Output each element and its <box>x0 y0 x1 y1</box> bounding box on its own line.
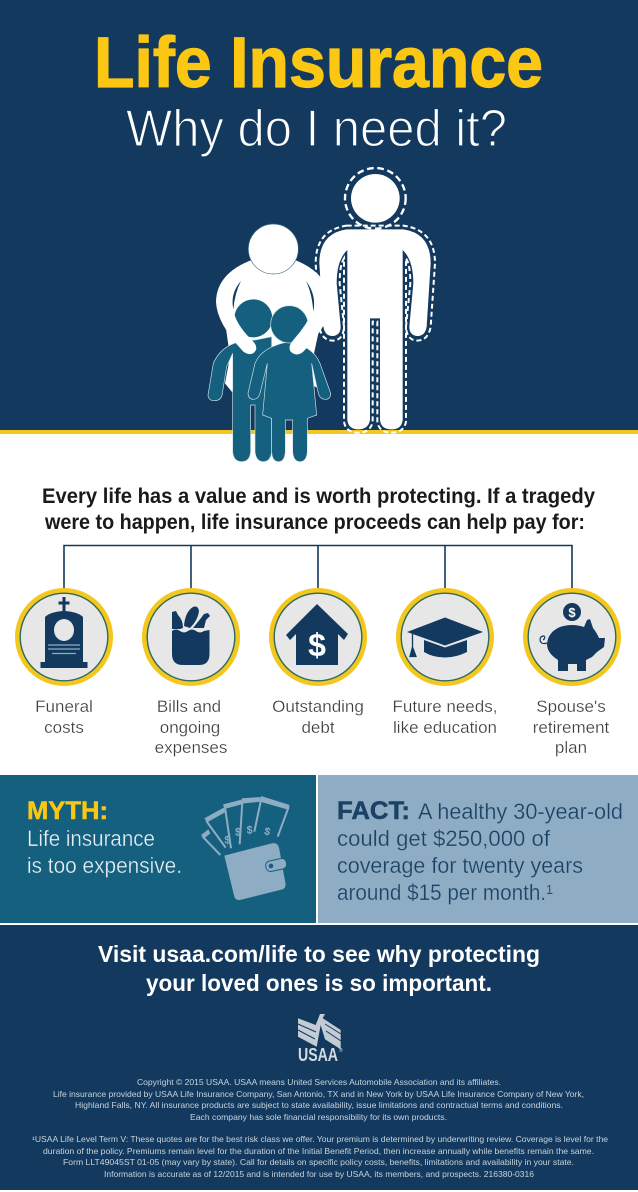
label: debt: Outstanding <box>272 697 364 716</box>
label: funeral costs: Funeral <box>35 697 93 716</box>
label: retirement: plan <box>555 738 587 757</box>
label: retirement <box>533 697 610 757</box>
icon: house with dollar: $ <box>308 627 326 663</box>
legal text: Each company has sole financial responsibility for its own products. <box>190 1112 447 1122</box>
panel: header background <box>0 0 638 430</box>
icon: child figure right <box>248 306 331 462</box>
label: education: Future needs, <box>393 697 497 716</box>
legal text: Highland Falls, NY. All insurance products are subject to state availability, issue limitations and contractual terms and conditions. <box>75 1100 563 1110</box>
icon: graduation cap <box>396 588 494 686</box>
label: debt: debt <box>301 718 335 737</box>
icon: wallet with cash: $ <box>263 826 272 839</box>
myth text: is too expensive. <box>27 853 182 878</box>
legal text: Form LLT49045ST 01-05 (may vary by state). Call for details on specific policy costs, benefits, limitations and availability in your state. <box>63 1157 574 1167</box>
icon: piggy bank <box>523 588 621 686</box>
label: funeral costs: costs <box>44 718 84 737</box>
myth text: Life insurance <box>27 826 155 851</box>
icon: adult figure arms and head <box>216 224 331 354</box>
legal text: Information is accurate as of 12/2015 and is intended for use by USAA, its members, and prospects. 216380-0316 <box>104 1169 534 1179</box>
label: retirement: Spouse's <box>536 697 606 716</box>
label: retirement: retirement <box>533 718 610 737</box>
fact text: FACT: <box>337 797 410 825</box>
label: education: like education <box>393 718 497 737</box>
myth text: MYTH: <box>27 797 108 825</box>
title: Why do I need it? <box>126 100 507 158</box>
label: funeral costs <box>35 697 93 737</box>
panel: fact <box>318 775 638 923</box>
legal text: duration of the policy. Premiums remain level for the duration of the Initial Benefit Period, then increase annually while benefits remain the same. <box>43 1146 594 1156</box>
fact text: could get $250,000 of <box>337 826 551 851</box>
logo: USAA: ® <box>339 1047 343 1054</box>
call to action: Visit usaa.com/life to see why protecting <box>98 941 540 967</box>
label: education <box>393 697 497 737</box>
label: bills: ongoing <box>160 718 220 737</box>
icon: child figure left <box>208 299 272 462</box>
fact text: A healthy 30-year-old <box>418 799 623 824</box>
fact text: around $15 per month.¹ <box>337 880 553 905</box>
icon: wallet with cash: $ <box>224 834 230 846</box>
label: debt <box>272 697 364 737</box>
heading: intro text: were to happen, life insurance proceeds can help pay for: <box>44 511 585 534</box>
call to action: your loved ones is so important. <box>146 970 492 996</box>
legal text <box>32 1077 608 1179</box>
icon: house with dollar <box>269 588 367 686</box>
heading: intro text: Every life has a value and is worth protecting. If a tragedy <box>42 485 595 508</box>
legal text: ¹USAA Life Level Term V: These quotes are for the best risk class we offer. Your premium is determined by underwriting review. Coverage is level for the <box>32 1134 608 1144</box>
label: bills <box>155 697 227 757</box>
illustration: family figures <box>208 168 435 462</box>
title <box>94 24 543 158</box>
fact text <box>337 797 623 905</box>
call to action <box>98 941 540 996</box>
logo: USAA <box>298 1014 343 1065</box>
logo: USAA: USAA <box>298 1044 338 1065</box>
legal text: Copyright © 2015 USAA. USAA means United Services Automobile Association and its affiliates. <box>137 1077 501 1087</box>
fact text: coverage for twenty years <box>337 853 583 878</box>
label: bills: expenses <box>155 738 227 757</box>
icon: adult figure torso <box>223 267 323 392</box>
icon: piggy bank: $ <box>568 605 576 620</box>
icon: groceries bag <box>142 588 240 686</box>
connector lines <box>64 545 572 589</box>
legal text: Life insurance provided by USAA Life Insurance Company, San Antonio, TX and in New York by USAA Life Insurance Company of New York, <box>53 1089 584 1099</box>
label: bills: Bills and <box>157 697 221 716</box>
myth text <box>27 797 182 878</box>
heading: intro text <box>42 485 595 534</box>
icon: wallet with cash: $ <box>235 827 241 839</box>
icon: wallet with cash <box>201 796 290 900</box>
icon: wallet with cash: $ <box>247 824 253 836</box>
panel: myth <box>0 775 316 923</box>
icon: funeral costs <box>15 588 113 686</box>
yellow rule <box>0 430 638 434</box>
title: Life Insurance <box>94 24 543 103</box>
panel: footer background <box>0 925 638 1190</box>
icon: absent parent figure <box>316 168 435 433</box>
